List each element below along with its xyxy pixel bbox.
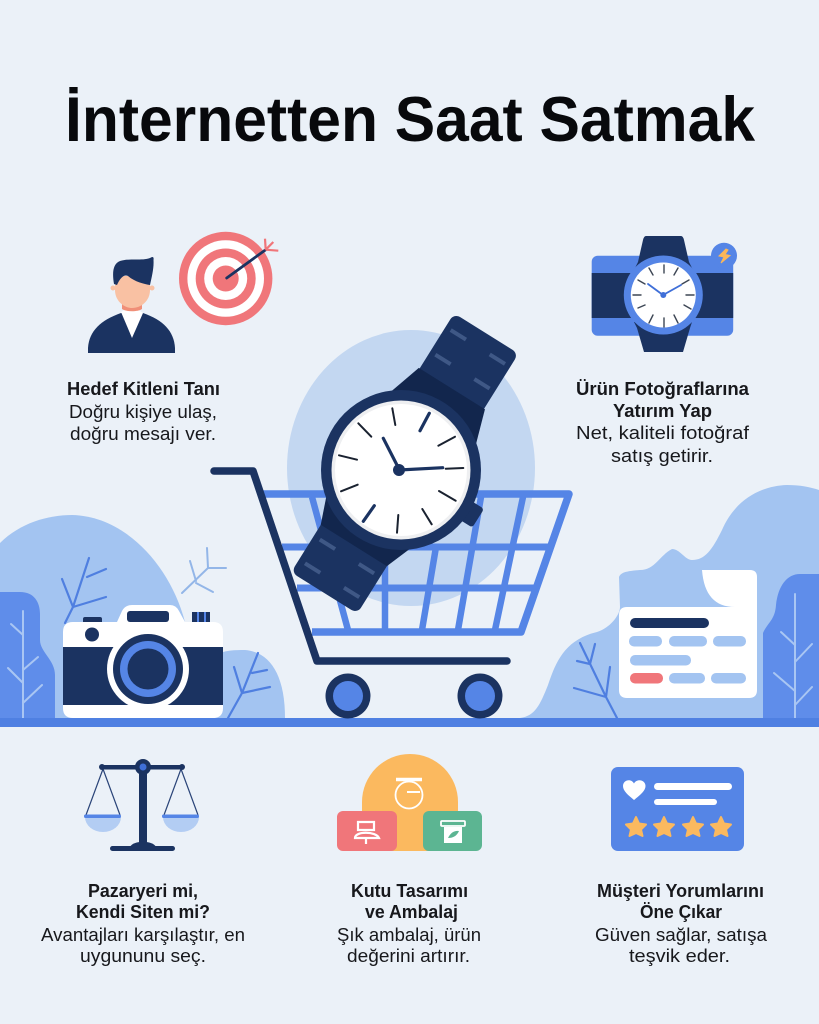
text: Ürün Fotoğraflarına: Ürün Fotoğraflarına xyxy=(576,379,750,399)
left hill xyxy=(0,515,190,718)
text: Müşteri Yorumlarını: teşvik eder. xyxy=(629,946,730,966)
text: Pazaryeri mi: Avantajları karşılaştır, en xyxy=(41,925,245,945)
small hill twig xyxy=(228,653,270,718)
review card illustration xyxy=(619,570,757,698)
icon: customer review card xyxy=(611,767,744,851)
backdrop circle xyxy=(287,330,535,606)
text: Müşteri Yorumlarını xyxy=(595,881,768,966)
text: Pazaryeri mi: Pazaryeri mi, xyxy=(88,881,198,901)
text: Müşteri Yorumlarını: Müşteri Yorumlarını xyxy=(597,881,764,901)
camera xyxy=(63,605,223,718)
icon: packaging boxes xyxy=(337,754,482,851)
left bush xyxy=(0,592,55,718)
icon: target with arrow xyxy=(179,232,278,325)
text: Hedef Kitleni Tanı: Hedef Kitleni Tanı xyxy=(67,379,220,399)
text: Kutu Tasarımı: ve Ambalaj xyxy=(365,902,458,922)
text: Pazaryeri mi xyxy=(41,881,245,966)
text: Ürün Fotoğraflarına: satış getirir. xyxy=(611,446,713,466)
text: Kutu Tasarımı: değerini artırır. xyxy=(347,946,470,966)
left bush twig xyxy=(8,611,42,718)
right small hill xyxy=(215,650,285,718)
text: Ürün Fotoğraflarına: Yatırım Yap xyxy=(613,401,712,421)
text: Hedef Kitleni Tanı: Doğru kişiye ulaş, xyxy=(69,402,217,422)
icon: watch on camera xyxy=(592,236,737,352)
text: Pazaryeri mi: Kendi Siten mi? xyxy=(76,902,210,922)
icon: balance scale xyxy=(84,759,199,851)
text: Ürün Fotoğraflarına xyxy=(576,379,750,466)
text: Kutu Tasarımı: Şık ambalaj, ürün xyxy=(337,925,481,945)
text: Müşteri Yorumlarını: Öne Çıkar xyxy=(640,902,722,922)
text: Hedef Kitleni Tanı: doğru mesajı ver. xyxy=(70,424,216,444)
right hill twig xyxy=(574,643,617,718)
text: Müşteri Yorumlarını: Güven sağlar, satışa xyxy=(595,925,768,945)
right bush xyxy=(763,574,819,718)
text: Pazaryeri mi: uygununu seç. xyxy=(80,946,206,966)
ground line xyxy=(0,718,819,727)
title: İnternetten Saat Satmak xyxy=(65,85,756,155)
text: Kutu Tasarımı: Kutu Tasarımı xyxy=(351,881,468,901)
wristwatch xyxy=(280,306,563,641)
right hills xyxy=(520,485,819,718)
floating twig xyxy=(182,548,226,593)
text: Kutu Tasarımı xyxy=(337,881,481,966)
right bush twig xyxy=(774,594,812,718)
text: Hedef Kitleni Tanı xyxy=(67,379,220,444)
left hill twig xyxy=(62,558,106,623)
text: Ürün Fotoğraflarına: Net, kaliteli fotoğraf xyxy=(576,423,750,443)
shopping cart basket xyxy=(263,494,569,632)
icon: target audience person xyxy=(88,257,175,353)
shopping cart frame xyxy=(214,471,507,718)
